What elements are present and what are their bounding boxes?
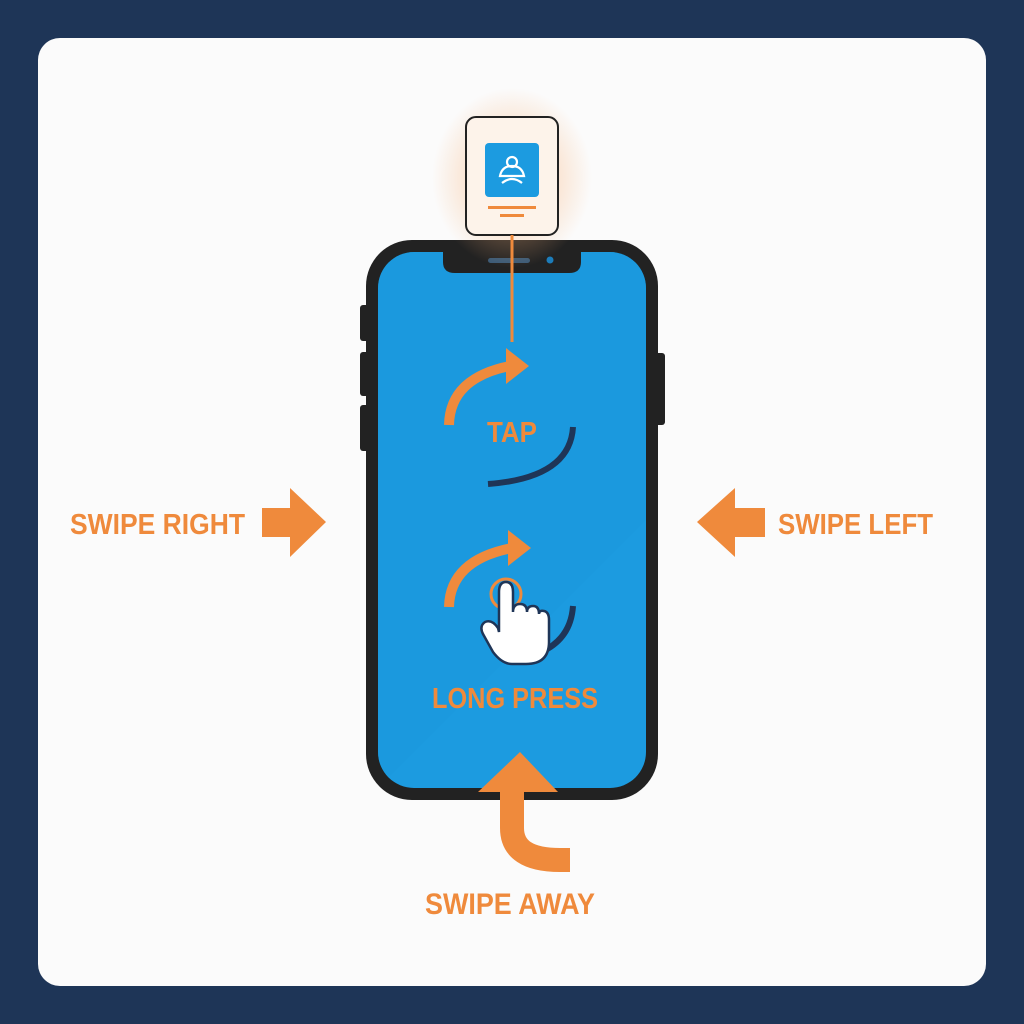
arrow: swipe away bbox=[478, 752, 570, 860]
gesture: long press: LONG PRESS bbox=[432, 683, 598, 715]
label: swipe left: SWIPE LEFT bbox=[778, 509, 933, 541]
connector line bbox=[510, 235, 514, 342]
icon: hand bbox=[481, 582, 549, 664]
phone bbox=[360, 240, 665, 800]
icon: person bbox=[500, 157, 524, 183]
label: swipe away: SWIPE AWAY bbox=[425, 888, 595, 921]
gesture: long press bbox=[432, 530, 598, 715]
arrow: swipe left bbox=[697, 488, 765, 557]
gesture: tap: TAP bbox=[487, 417, 537, 449]
label: swipe right: SWIPE RIGHT bbox=[70, 509, 245, 541]
gesture: tap bbox=[449, 348, 573, 484]
arrow: swipe right bbox=[262, 488, 326, 557]
notification card bbox=[432, 88, 592, 268]
